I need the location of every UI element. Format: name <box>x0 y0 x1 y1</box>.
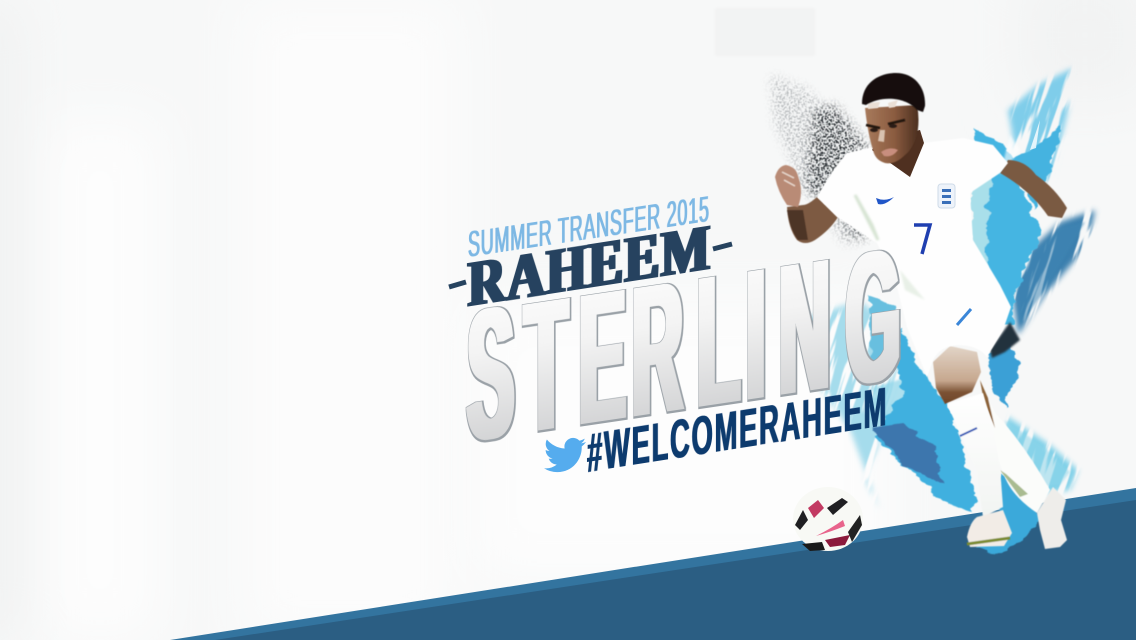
icon: twitter bird <box>544 438 586 472</box>
shirt folds and shading <box>855 195 925 300</box>
hashtag: #WelcomeRaheem: #WELCOMERAHEEM <box>587 377 888 485</box>
headline lockup <box>449 189 901 485</box>
surname shadow: STERLING <box>468 209 901 481</box>
paint splash: dark grey grit <box>770 75 870 245</box>
surname: Sterling: STERLING <box>467 208 900 481</box>
kicker: Summer Transfer 2015: SUMMER TRANSFER 2015 <box>468 189 710 266</box>
left arm and fist <box>775 165 838 243</box>
first name: Raheem: RAHEEM <box>468 210 712 320</box>
shirt details: swoosh, crest, number 7 <box>876 184 971 325</box>
hair <box>862 73 925 112</box>
dash left of name <box>449 282 466 287</box>
facial features <box>866 100 905 156</box>
player: Raheem Sterling running <box>775 73 1067 549</box>
white England shirt and shorts <box>817 138 1011 377</box>
neck and face <box>872 130 924 177</box>
dash right of name <box>713 244 732 249</box>
rear leg and boot <box>980 380 1067 549</box>
diagonal footer band <box>170 488 1136 640</box>
front leg, sock and boot <box>933 346 1012 547</box>
football <box>793 487 863 551</box>
paint splash: blue brush strokes <box>670 0 1136 597</box>
right arm <box>1000 160 1067 218</box>
